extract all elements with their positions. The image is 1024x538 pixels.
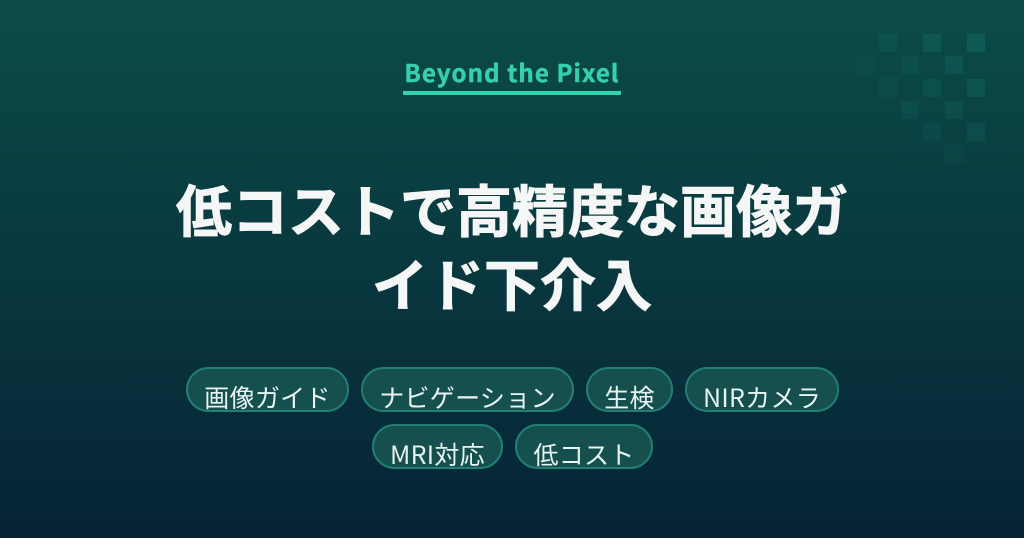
title: イド下介入 — [372, 242, 652, 323]
tag: NIRカメラ: NIRカメラ — [703, 379, 821, 415]
tag: 低コスト: 低コスト — [533, 436, 635, 472]
tag: ナビゲーション: ナビゲーション — [379, 379, 556, 415]
title — [176, 168, 848, 323]
brand label: Beyond the Pixel: Beyond the Pixel — [404, 54, 620, 89]
tag: NIRカメラ — [685, 367, 839, 412]
tag: 画像ガイド — [186, 367, 349, 412]
tag: ナビゲーション — [361, 367, 574, 412]
tag: MRI対応: MRI対応 — [390, 436, 485, 472]
tag: 画像ガイド: 画像ガイド — [204, 379, 331, 415]
decorative pixel pattern — [879, 34, 985, 141]
tag: 生検: 生検 — [604, 379, 655, 415]
tag: MRI対応 — [372, 424, 503, 469]
tag: 生検 — [586, 367, 673, 412]
tag: 低コスト — [515, 424, 653, 469]
title: 低コストで高精度な画像ガ — [176, 168, 848, 249]
